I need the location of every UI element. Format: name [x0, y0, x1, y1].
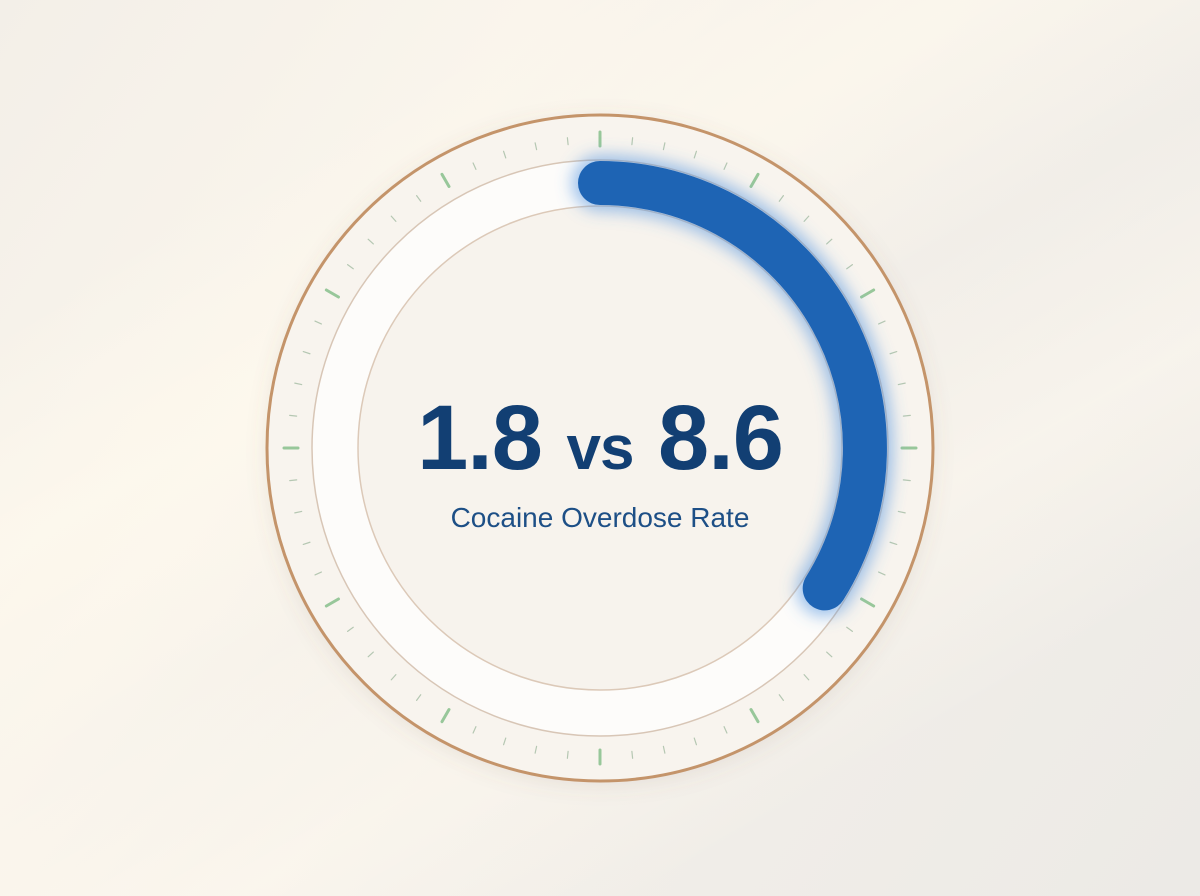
progress arc [600, 183, 865, 588]
headline value: 1.8 vs 8.6 [417, 387, 783, 489]
tick marks [284, 132, 916, 764]
subtitle: Cocaine Overdose Rate [451, 502, 749, 533]
